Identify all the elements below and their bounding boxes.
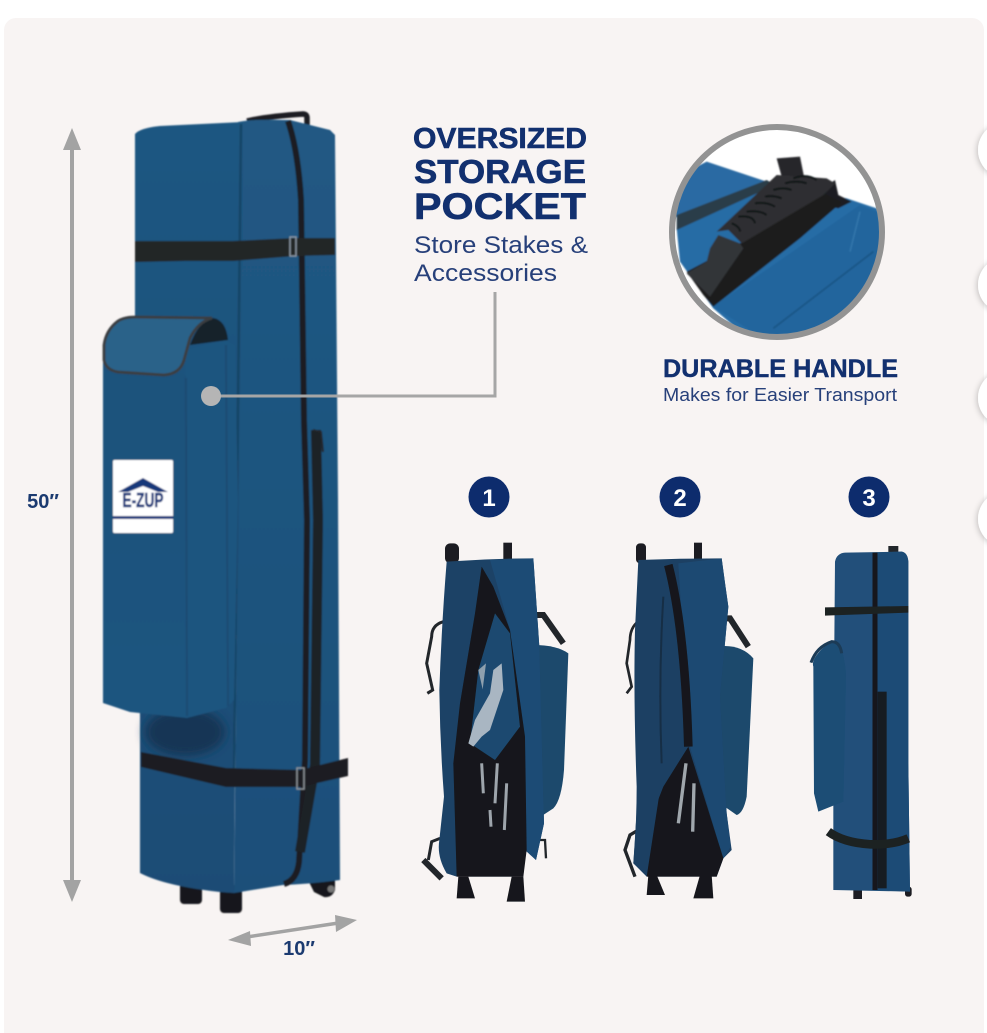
exposed frame <box>647 747 723 877</box>
heading: oversized storage pocket <box>413 123 587 227</box>
upper bag area <box>676 160 765 218</box>
handle <box>888 546 898 556</box>
front strap <box>687 235 743 297</box>
lower strap <box>141 752 348 787</box>
side straps <box>427 622 443 693</box>
step badge 2 <box>660 476 700 518</box>
top loops <box>445 543 512 563</box>
side fold shading <box>234 124 241 770</box>
feet <box>457 877 475 898</box>
side straps <box>627 620 640 693</box>
pocket front panel <box>103 345 187 718</box>
pocket side panel <box>185 340 238 718</box>
bag body <box>633 558 732 877</box>
lower edge strap <box>687 193 842 307</box>
folded canopy <box>470 613 520 760</box>
logo patch: E-ZUP <box>122 490 164 512</box>
leader line to pocket <box>201 292 495 406</box>
rear loop <box>777 157 804 177</box>
storage pocket <box>717 646 753 815</box>
logo patch <box>113 460 173 533</box>
pocket description: Accessories <box>414 260 557 287</box>
shadow under pocket <box>145 708 225 756</box>
pocket description: Store Stakes & <box>414 232 588 259</box>
lower strap <box>828 832 908 844</box>
feet <box>647 875 665 895</box>
heading: durable handle: DURABLE HANDLE <box>663 355 898 383</box>
carousel thumbnails at right edge <box>978 122 987 547</box>
pocket flap handle <box>811 642 842 663</box>
zipper band <box>677 180 775 230</box>
bag side panel <box>234 120 340 893</box>
lower strap buckle <box>297 768 304 789</box>
top strap <box>825 606 908 616</box>
main rolling bag <box>103 114 348 913</box>
frame opening <box>453 567 527 877</box>
zipper flap <box>668 565 688 747</box>
grip ridges <box>732 176 817 232</box>
top handle <box>247 114 307 125</box>
step badge 2: 2 <box>673 485 687 512</box>
pocket flap opening shadow <box>190 318 228 345</box>
second zipper <box>878 692 887 888</box>
pocket description <box>414 232 588 287</box>
10 inch width dimension <box>228 915 357 960</box>
step 3 bag closed <box>811 546 912 899</box>
handle grip <box>717 175 835 243</box>
50 inch height dimension: 50″ <box>27 491 59 513</box>
step badge 1 <box>468 476 510 518</box>
pocket flap <box>104 317 212 375</box>
heading: oversized storage pocket: OVERSIZED <box>413 123 587 155</box>
bag body <box>833 552 910 892</box>
pocket <box>813 642 846 812</box>
step badge 3 <box>848 476 890 518</box>
bottom feet <box>853 887 912 899</box>
50 inch height dimension <box>27 128 81 902</box>
handle close-up circle <box>667 127 893 348</box>
bag body <box>439 558 544 877</box>
lower bag area <box>676 192 879 332</box>
main zipper <box>867 553 882 890</box>
main zipper <box>284 121 307 884</box>
storage pocket <box>533 645 568 816</box>
white canopy fabric <box>468 663 503 747</box>
handle description: Makes for Easier Transport <box>663 385 897 405</box>
left bottom flap <box>633 747 688 863</box>
upper strap buckle <box>290 237 296 256</box>
frame highlights <box>678 763 694 832</box>
step badge 1: 1 <box>482 485 496 512</box>
10 inch width dimension: 10″ <box>283 938 315 960</box>
step 1 bag open <box>423 543 568 902</box>
right strap end <box>824 179 852 209</box>
heading: oversized storage pocket: STORAGE <box>414 154 586 191</box>
step 2 bag partly closed <box>625 543 753 898</box>
upper strap <box>135 238 335 262</box>
bag front panel <box>135 122 243 893</box>
frame highlights <box>482 763 507 830</box>
bag wheels <box>180 878 335 913</box>
step badge 3: 3 <box>862 485 876 512</box>
heading: oversized storage pocket: POCKET <box>414 186 586 227</box>
top loops <box>636 543 702 563</box>
accessory zipper <box>300 430 318 852</box>
